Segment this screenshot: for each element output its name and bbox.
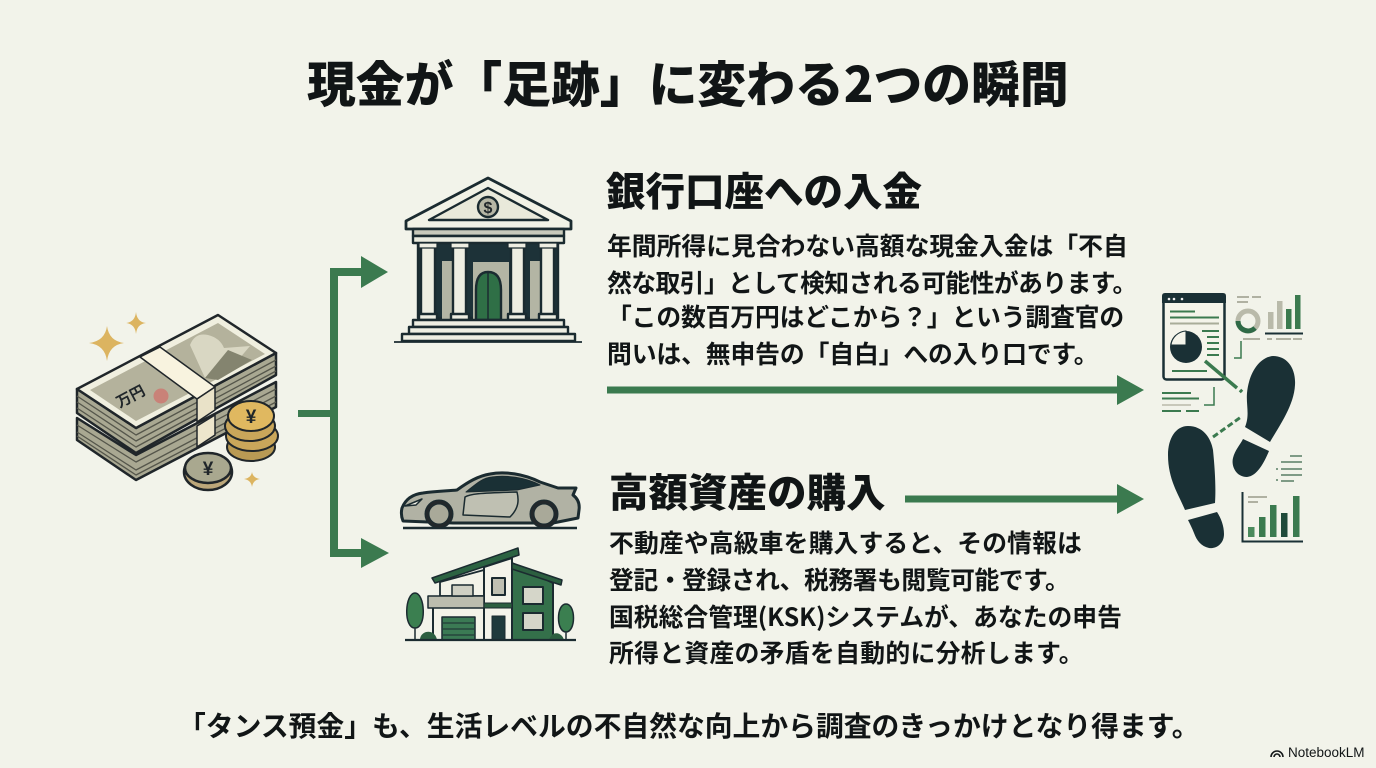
text block: high-value asset purchase: 国税総合管理(KSK)システムが、あなたの申告 [609, 598, 1122, 634]
icon: single yen coin [184, 453, 232, 490]
text block: bank deposit: 「この数百万円はどこから？」という調査官の [607, 298, 1124, 334]
text block: bank deposit: 問いは、無申告の「自白」への入り口です。 [607, 335, 1098, 371]
text block: bank deposit: 年間所得に見合わない高額な現金入金は「不自 [607, 227, 1128, 263]
icon: yen symbol on stack: ¥ [246, 407, 257, 428]
icon: right shoe sole [1245, 356, 1295, 442]
icon: magnifier dashed trace [1205, 361, 1242, 392]
arrow: asset heading to footprints [905, 484, 1144, 514]
icon: left shoe heel [1188, 512, 1224, 548]
icon: yen coin stack [225, 401, 278, 461]
icon: sports car [401, 473, 579, 528]
heading: bank deposit: 銀行口座への入金 [606, 161, 922, 218]
arrow: branching connector [298, 256, 389, 568]
icon: modern house with trees [405, 548, 576, 640]
icon: left shoe sole [1168, 426, 1215, 510]
icon: report window with pie chart [1162, 293, 1226, 380]
text block: high-value asset purchase: 所得と資産の矛盾を自動的に分析します。 [609, 634, 1084, 670]
text block: bank deposit [607, 227, 1137, 371]
icon: dashed link between footprints [1213, 417, 1241, 437]
icon: bar chart bottom right [1242, 492, 1303, 542]
icon: footprints [1168, 356, 1295, 548]
icon: NotebookLM logo [1271, 751, 1283, 757]
icon: yen symbol on coin: ¥ [203, 459, 214, 480]
icon: small text lines [1162, 341, 1241, 411]
title: 現金が「足跡」に変わる2つの瞬間 [307, 46, 1069, 117]
icon: gold sparkles [89, 312, 260, 487]
text block: bank deposit: 然な取引」として検知される可能性があります。 [607, 264, 1137, 300]
heading: high-value asset purchase: 高額資産の購入 [609, 462, 886, 519]
icon: small list lines [1276, 456, 1302, 481]
NotebookLM mark: NotebookLM [1288, 745, 1365, 760]
icon: dollar on bank pediment: $ [484, 200, 493, 217]
icon: donut chart [1238, 311, 1258, 331]
icon: stack of yen banknotes and coins [77, 315, 276, 480]
text block: high-value asset purchase: 登記・登録され、税務署も閲覧可能です。 [609, 561, 1069, 597]
arrow: bank text to footprints [607, 375, 1144, 405]
icon: 万円 label: 万円 [112, 380, 149, 412]
icon: bar chart top right [1237, 295, 1303, 339]
text block: high-value asset purchase [609, 524, 1122, 670]
footer note: 「タンス預金」も、生活レベルの不自然な向上から調査のきっかけとなり得ます。 [178, 705, 1200, 745]
icon: right shoe heel [1233, 439, 1269, 477]
text block: high-value asset purchase: 不動産や高級車を購入すると、その情報は [609, 524, 1082, 560]
icon: bank building [394, 178, 582, 342]
